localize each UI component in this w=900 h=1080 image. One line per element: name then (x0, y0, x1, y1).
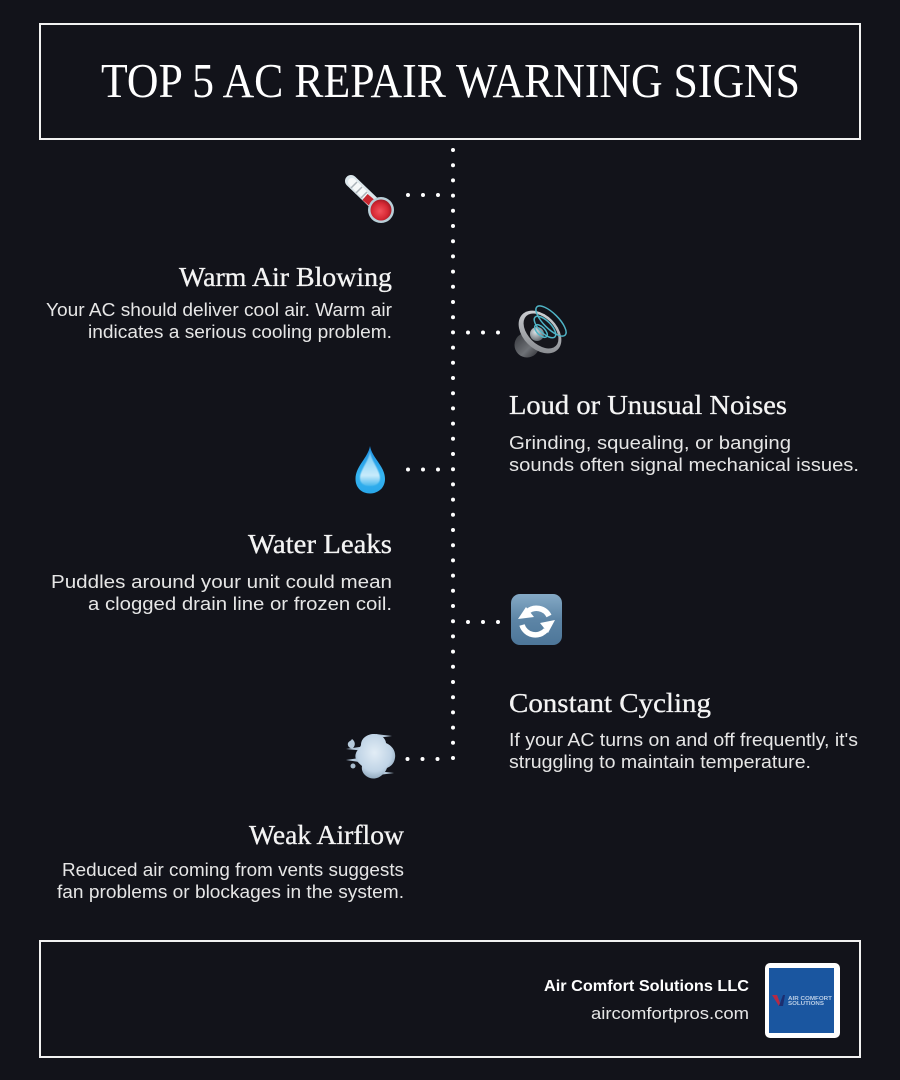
description: Grinding, squealing, or banging (509, 433, 791, 453)
logo: AIR COMFORT (788, 996, 832, 1002)
sign 3: water leaks (51, 446, 392, 614)
title (40, 24, 860, 139)
description: a clogged drain line or frozen coil. (88, 594, 392, 614)
description: Puddles around your unit could mean (51, 572, 392, 592)
icon: puff of air (346, 734, 395, 779)
description: struggling to maintain temperature. (509, 752, 811, 772)
dotted timeline (408, 150, 500, 762)
description: indicates a serious cooling problem. (88, 322, 392, 342)
description: sounds often signal mechanical issues. (509, 455, 859, 475)
heading: Water Leaks (248, 529, 392, 559)
sign 2: loud or unusual noises (509, 302, 859, 475)
logo: SOLUTIONS (788, 1001, 825, 1007)
heading: Weak Airflow (249, 820, 404, 850)
icon: speaker (510, 302, 570, 362)
sign 4: constant cycling (509, 594, 858, 772)
title: TOP 5 AC REPAIR WARNING SIGNS (101, 53, 800, 108)
description: Your AC should deliver cool air. Warm air (46, 300, 392, 320)
icon: cycling arrows (511, 594, 562, 645)
logo (765, 963, 840, 1038)
heading: Loud or Unusual Noises (509, 390, 787, 420)
description: If your AC turns on and off frequently, it's (509, 730, 858, 750)
description (46, 300, 392, 342)
description (57, 860, 404, 902)
icon: thermometer (351, 181, 394, 223)
description (509, 433, 859, 475)
company name: Air Comfort Solutions LLC (544, 978, 749, 995)
sign 1: warm air blowing (46, 181, 394, 342)
heading: Warm Air Blowing (179, 262, 392, 292)
heading: Constant Cycling (509, 688, 711, 718)
sign 5: weak airflow (57, 734, 404, 902)
description (51, 572, 392, 614)
description: Reduced air coming from vents suggests (62, 860, 404, 880)
icon: water drop (356, 446, 385, 494)
description: fan problems or blockages in the system. (57, 882, 404, 902)
website: aircomfortpros.com (591, 1004, 749, 1023)
footer (40, 941, 860, 1057)
description (509, 730, 858, 772)
